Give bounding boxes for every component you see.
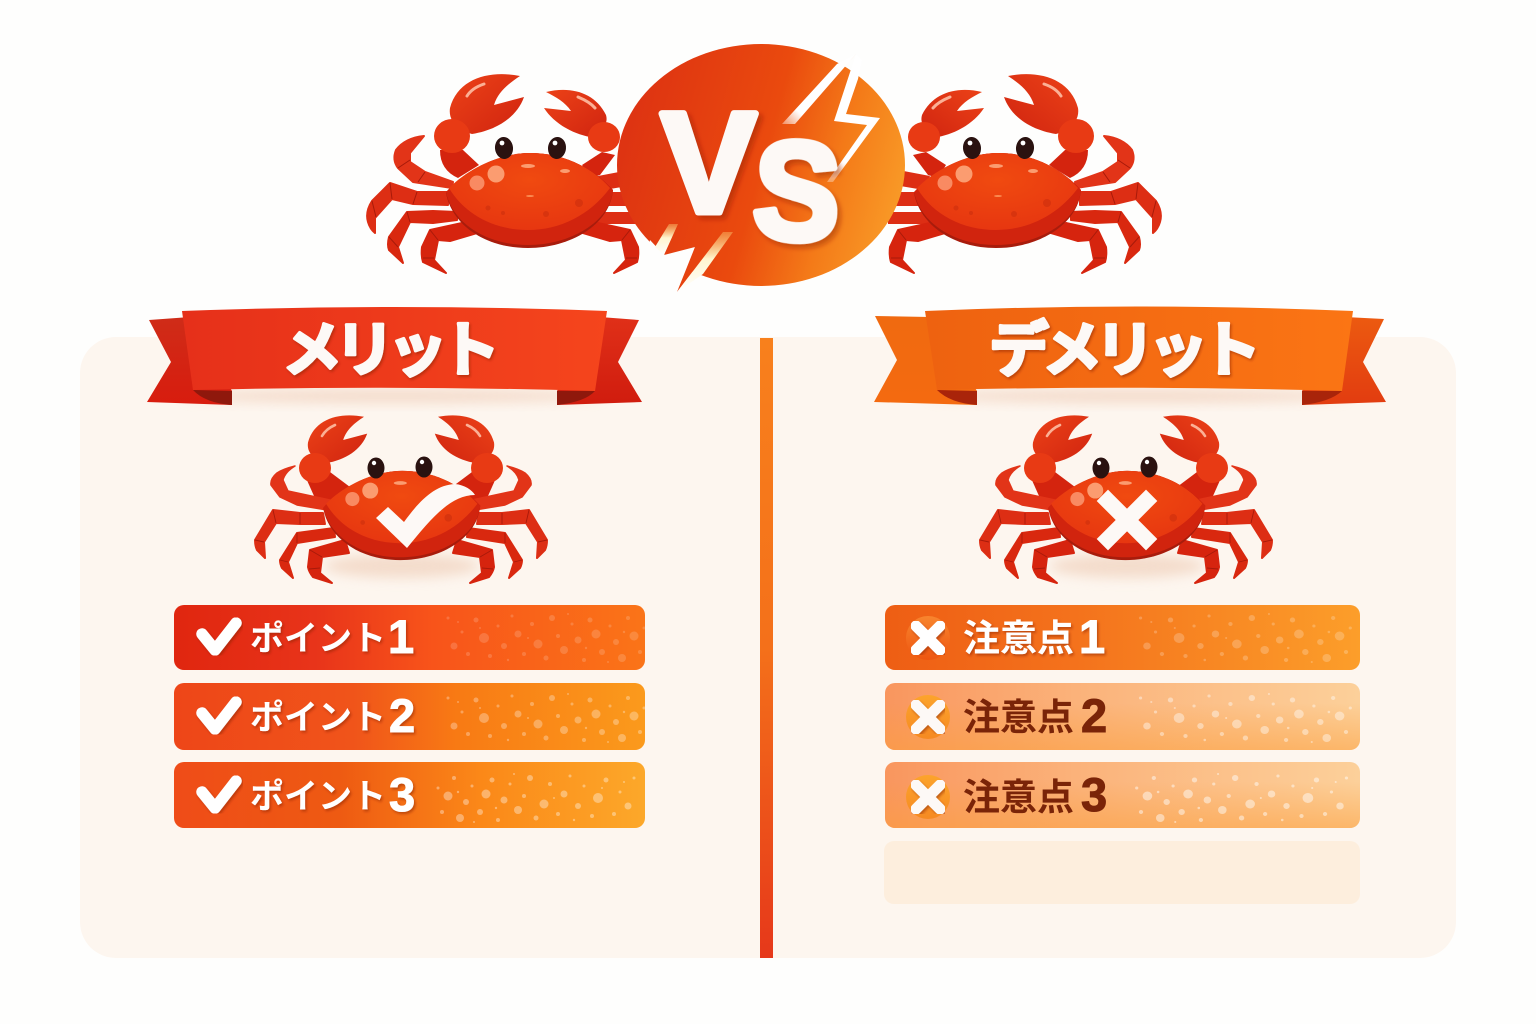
panel: comparison background: [80, 337, 1456, 958]
list: demerit cautions: [884, 605, 1360, 904]
bar: caution 1: [885, 605, 1360, 670]
bar: empty placeholder: [884, 841, 1360, 904]
bar: point 3: ポイント: [250, 778, 386, 816]
bar: caution 3: 3: [1081, 768, 1107, 821]
bar: point 2: ポイント: [250, 699, 386, 737]
illustration: right crab: [888, 74, 1161, 273]
bar: point 1: ポイント: [250, 620, 386, 658]
illustration: left crab: [367, 74, 640, 273]
bar: caution 1: 注意点: [963, 618, 1074, 659]
heading: merit: メリット: [282, 317, 500, 384]
badge: VS lightning emblem: [617, 44, 905, 300]
bar: point 3: [174, 762, 645, 828]
icon: check on crab: [376, 484, 475, 548]
bar: point 3: 3: [389, 768, 415, 821]
divider: center line: [760, 338, 773, 958]
bar: point 1: 1: [388, 610, 414, 663]
bar: point 1: [174, 605, 646, 670]
ribbon: merit: [147, 307, 642, 405]
illustration: crab with check mark: [255, 415, 547, 583]
illustration: crab with cross mark: [980, 415, 1272, 583]
bar: caution 3: [885, 762, 1360, 828]
ribbon: demerit: [874, 306, 1386, 405]
bar: caution 1: 1: [1079, 610, 1105, 663]
bar: caution 3: 注意点: [963, 777, 1074, 818]
bar: point 2: 2: [389, 689, 415, 742]
heading: S of VS: S: [749, 111, 844, 272]
bar: caution 2: [885, 683, 1360, 750]
bar: caution 2: 2: [1081, 689, 1107, 742]
list: merit points: [174, 605, 646, 828]
bar: point 2: [174, 683, 646, 750]
bar: caution 2: 注意点: [963, 697, 1074, 738]
icon: cross on crab: [1108, 501, 1146, 539]
heading: demerit: デメリット: [989, 317, 1261, 384]
heading: V of VS: V: [661, 84, 756, 243]
